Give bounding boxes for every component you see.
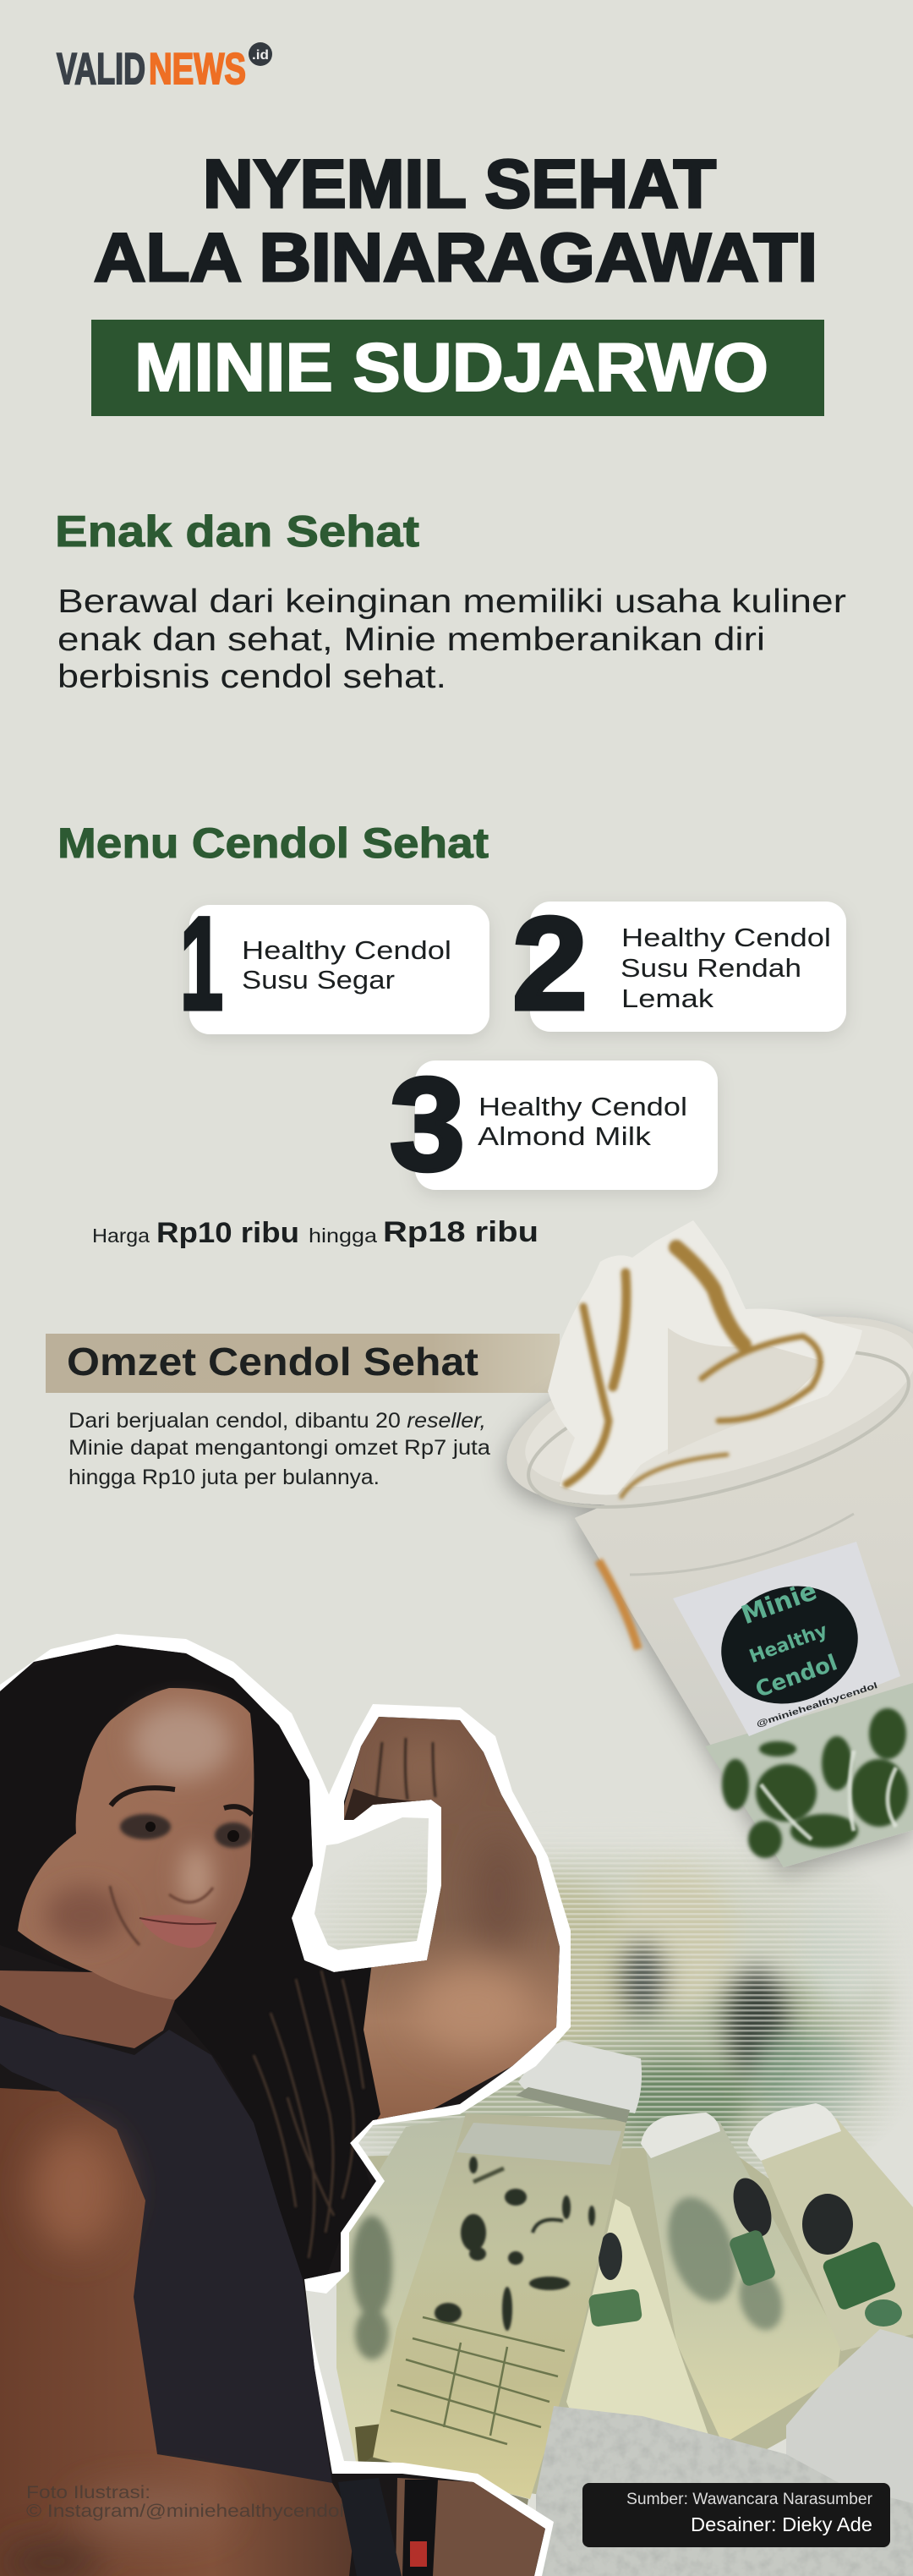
bottle: right 2	[747, 2103, 913, 2351]
lid	[509, 1290, 913, 1521]
long dark hair	[0, 1645, 380, 2279]
menu card 3	[390, 1051, 718, 1198]
logo: Validnews.id: VALID	[57, 45, 145, 94]
sticker label	[673, 1542, 900, 1736]
bottle: back left	[336, 2114, 482, 2478]
caramel drizzle	[566, 1247, 820, 1497]
heading: Enak dan Sehat: Enak dan Sehat	[55, 507, 419, 556]
heading: Menu Cendol Sehat: Menu Cendol Sehat	[57, 819, 489, 867]
menu card 1: 1	[180, 891, 223, 1038]
text block: omzet: Minie dapat mengantongi omzet Rp7 juta	[68, 1436, 490, 1460]
cup band	[630, 1514, 854, 1575]
caramel orange streak	[599, 1560, 638, 1649]
text block: omzet: Dari berjualan cendol, dibantu 20 reseller,	[68, 1409, 486, 1433]
hand	[396, 2478, 545, 2576]
menu card 3: Almond Milk	[478, 1121, 652, 1151]
menu card 2: Lemak	[621, 984, 714, 1013]
menu card 2: Healthy Cendol	[621, 923, 831, 952]
menu card 2: Susu Rendah	[621, 953, 801, 983]
bottle: right 1	[641, 2113, 841, 2444]
wristwatch and band	[338, 2478, 438, 2576]
bottle: back middle	[566, 2199, 710, 2461]
raised arm	[338, 1717, 560, 2123]
white sticker outline	[0, 1634, 571, 2576]
photo: blurred bottle background	[325, 1849, 899, 2177]
menu card 1: Susu Segar	[242, 965, 395, 995]
photo: bodybuilder Minie Sudjarwo	[0, 1632, 592, 2576]
photo: ice blocks	[536, 2329, 913, 2576]
lower arm	[0, 2088, 355, 2576]
title: ALA BINARAGAWATI	[94, 220, 817, 296]
cendol layer	[705, 1683, 913, 1867]
name banner: Minie Sudjarwo	[91, 320, 824, 416]
logo: Validnews.id: NEWS	[149, 45, 246, 94]
whipped cream	[548, 1220, 862, 1495]
facial features	[110, 1788, 252, 1948]
backdrop between bottles	[355, 2148, 913, 2495]
sticker label: Minie	[737, 1576, 821, 1631]
credits box: Desainer: Dieky Ade	[691, 2513, 872, 2535]
face and neck	[0, 1688, 254, 2048]
logo: Validnews.id: .id	[252, 48, 269, 63]
heading band: Omzet Cendol Sehat: Omzet Cendol Sehat	[67, 1340, 478, 1384]
menu card 3: Healthy Cendol	[478, 1092, 687, 1121]
text block: intro: berbisnis cendol sehat.	[57, 659, 446, 695]
sticker label: Cendol	[752, 1650, 841, 1703]
menu card 3: 3	[390, 1051, 465, 1198]
menu card 1: Healthy Cendol	[242, 935, 451, 965]
text block: intro: Berawal dari keinginan memiliki usaha kuliner	[57, 584, 846, 620]
text block: omzet: hingga Rp10 juta per bulannya.	[68, 1466, 380, 1489]
heading band: Omzet Cendol Sehat	[46, 1334, 560, 1393]
name banner: Minie Sudjarwo: MINIE SUDJARWO	[134, 330, 768, 406]
logo: Validnews.id	[57, 42, 272, 94]
menu card 2: 2	[512, 891, 588, 1038]
caption: photo credit: © Instagram/@miniehealthycendol	[26, 2502, 344, 2521]
price range: Harga	[92, 1225, 150, 1247]
text block: intro: enak dan sehat, Minie memberanikan diri	[57, 622, 765, 658]
bottle: large front	[373, 2041, 642, 2499]
credits box: Sumber: Wawancara Narasumber	[626, 2491, 873, 2508]
title: NYEMIL SEHAT	[203, 146, 716, 222]
price range: Rp10 ribu	[156, 1217, 299, 1249]
price range: Rp18 ribu	[383, 1216, 539, 1248]
sticker label: @miniehealthycendol	[756, 1681, 879, 1729]
photo: cendol bottles	[336, 2041, 913, 2524]
price range	[92, 1216, 539, 1249]
dark gap below bottles	[355, 2457, 528, 2524]
text block: omzet	[68, 1409, 490, 1489]
text block: intro	[57, 584, 846, 695]
credits box	[582, 2483, 890, 2547]
menu card 2	[512, 891, 846, 1038]
black sleeveless top	[0, 2016, 332, 2483]
caption: photo credit: Foto Ilustrasi:	[26, 2483, 150, 2502]
sticker label: Healthy	[746, 1620, 830, 1668]
price range: hingga	[309, 1225, 377, 1247]
menu card 1	[180, 891, 489, 1038]
photo: cendol cup	[488, 1220, 913, 1867]
caption: photo credit	[26, 2483, 344, 2521]
title	[94, 146, 817, 296]
